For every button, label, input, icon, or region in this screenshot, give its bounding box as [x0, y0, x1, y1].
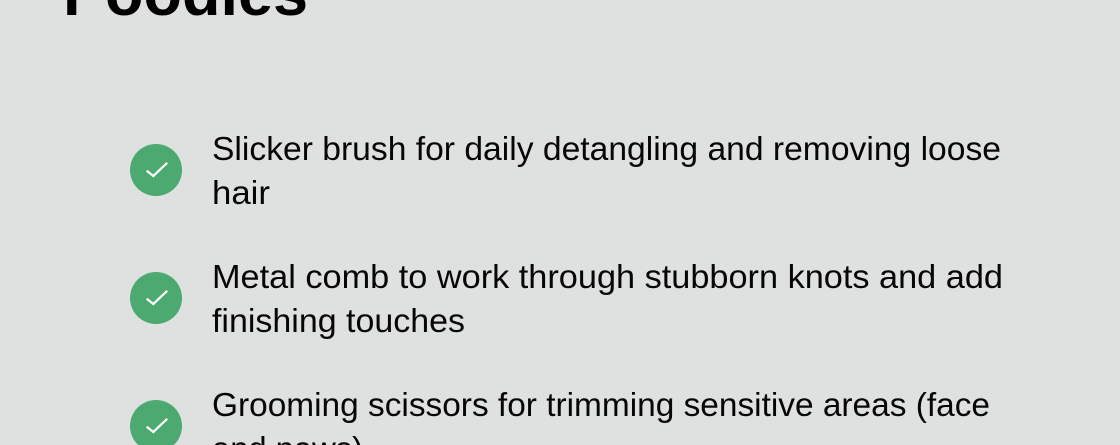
- text: metal comb: finishing touches: [212, 302, 465, 339]
- text: grooming scissors: Grooming scissors for trimming sensitive areas (face: [212, 386, 990, 423]
- list item: grooming scissors: [130, 386, 990, 445]
- text: slicker brush: Slicker brush for daily detangling and removing loose: [212, 130, 1001, 167]
- text: metal comb: [212, 258, 1003, 339]
- text: grooming scissors: [212, 386, 990, 445]
- icon: check badge: [130, 144, 182, 196]
- list item: metal comb: [130, 258, 1003, 339]
- icon: check badge: [130, 400, 182, 445]
- text: metal comb: Metal comb to work through stubborn knots and add: [212, 258, 1003, 295]
- icon: check badge: [130, 272, 182, 324]
- text: slicker brush: [212, 130, 1001, 211]
- list item: slicker brush: [130, 130, 1001, 211]
- text: slicker brush: hair: [212, 174, 270, 211]
